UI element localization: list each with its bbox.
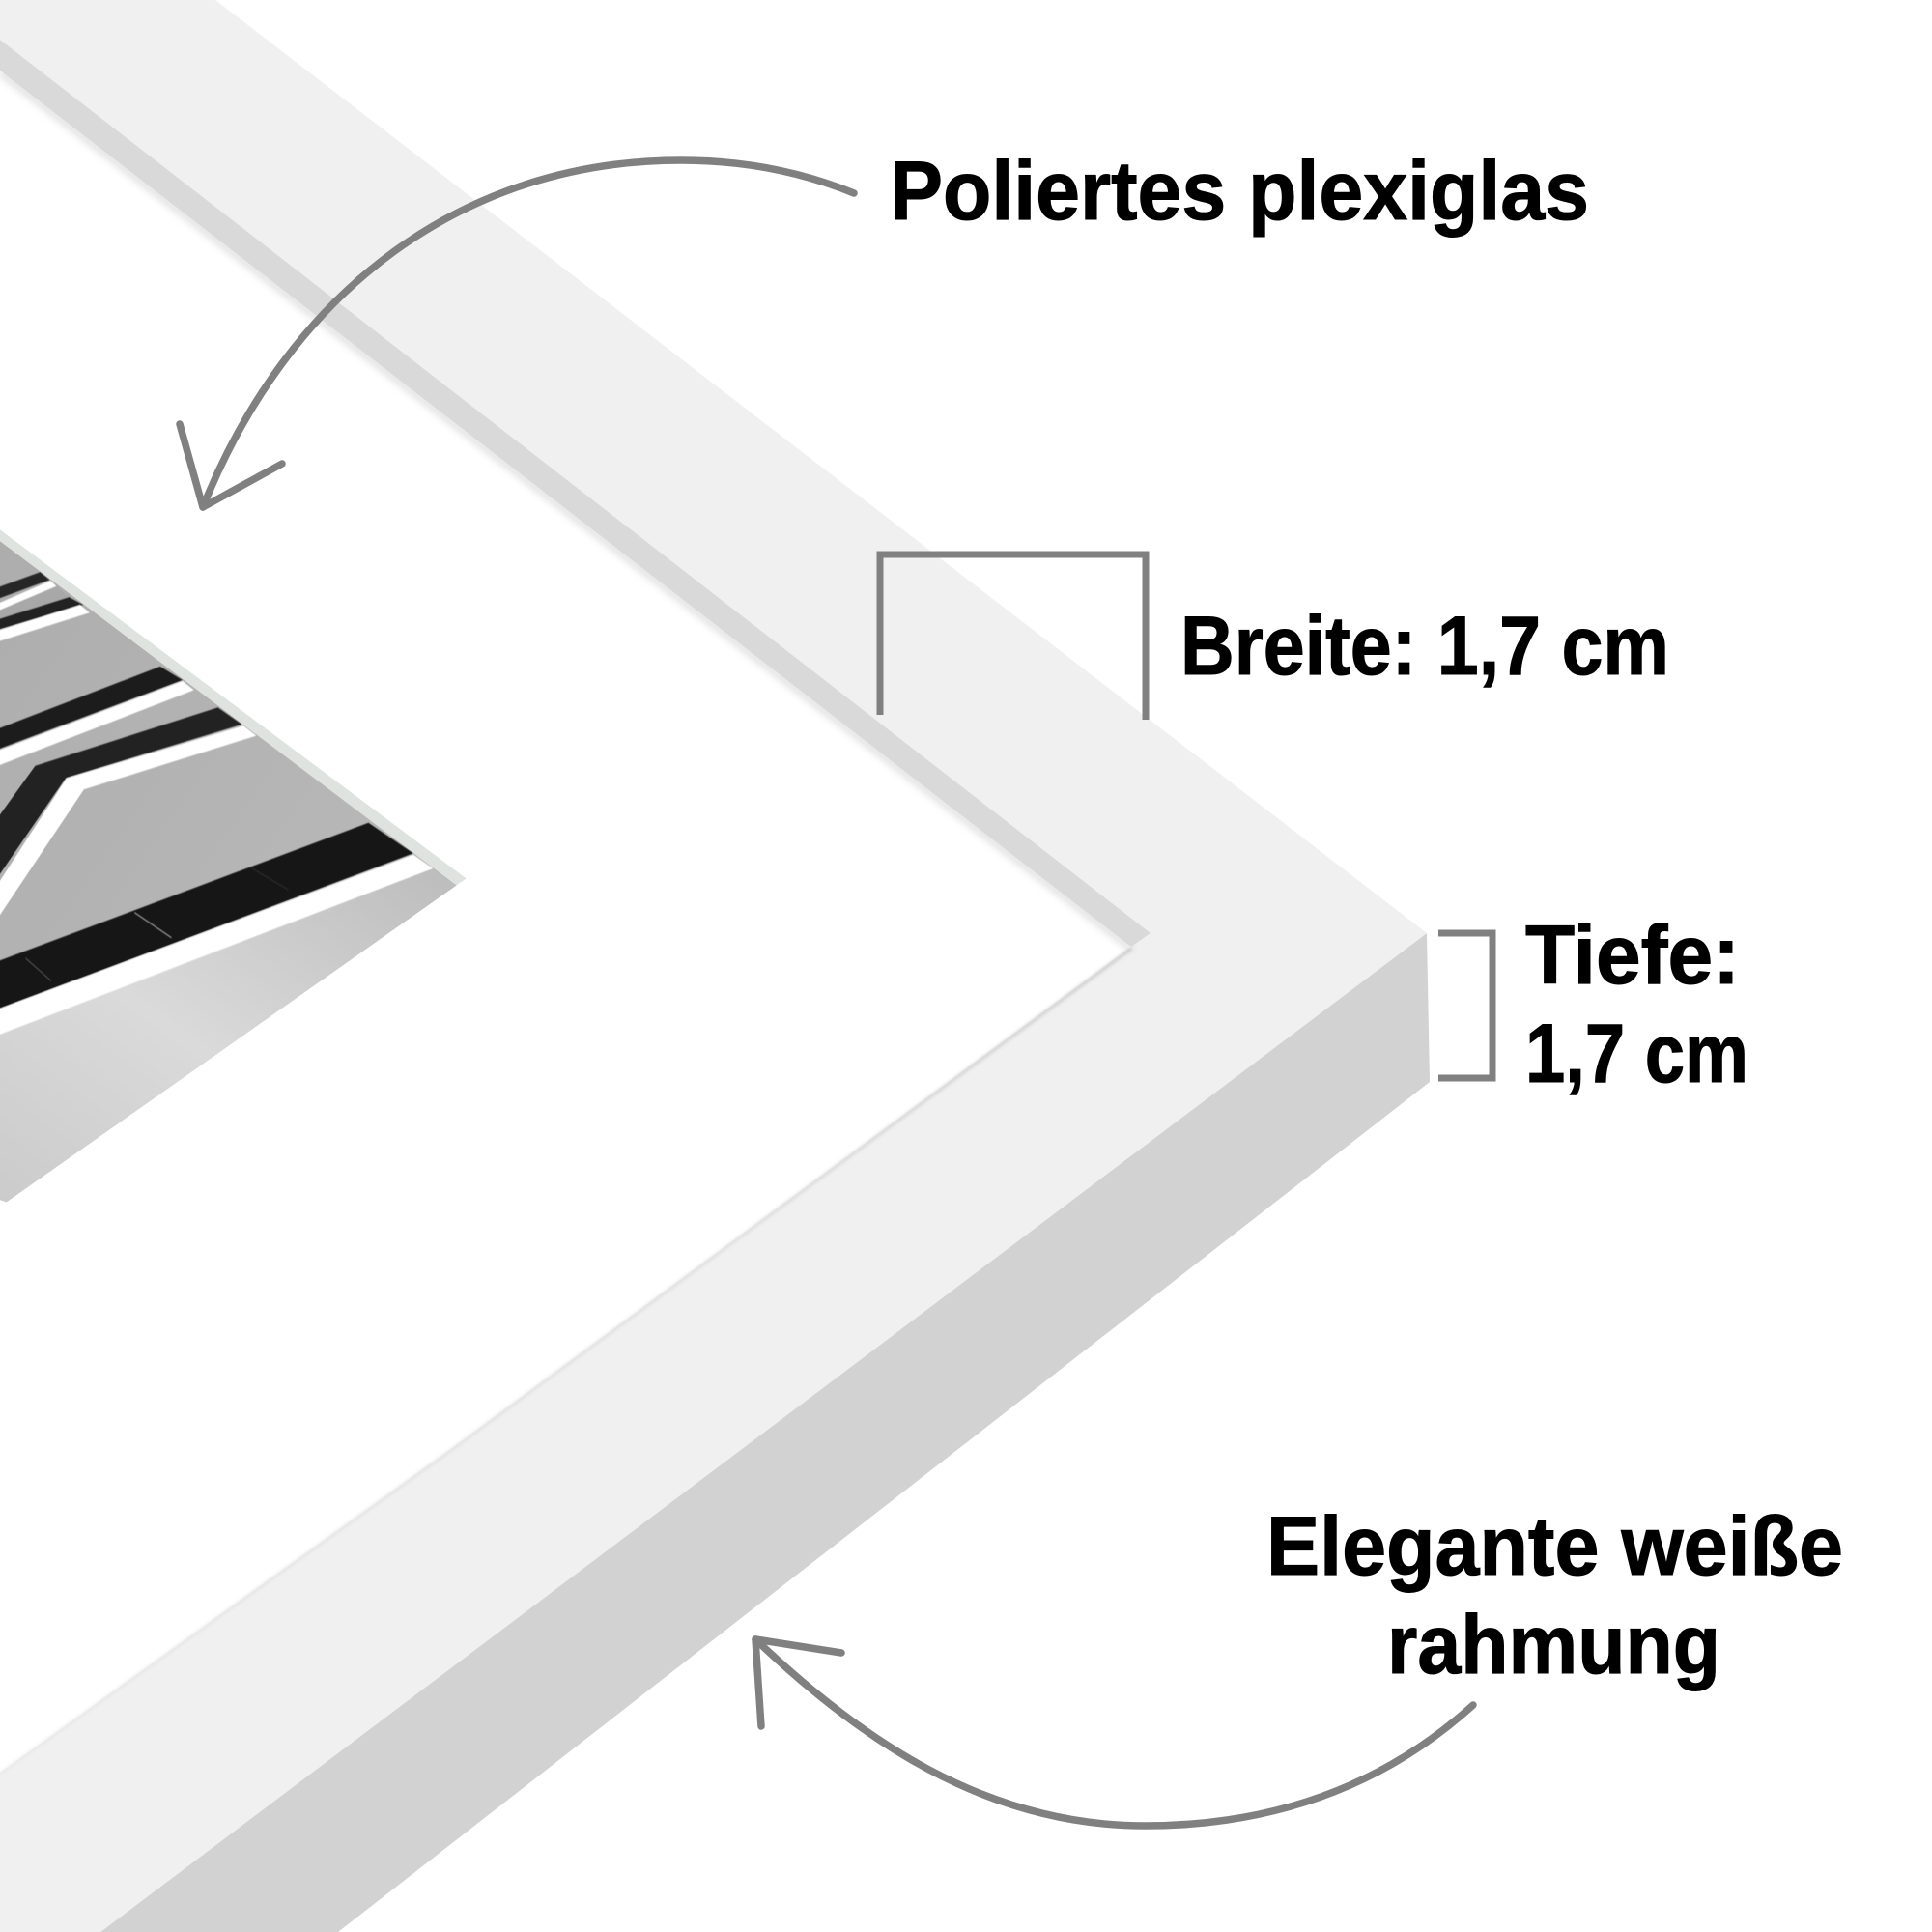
frame front face — [0, 0, 1427, 1932]
photo base — [0, 541, 457, 1202]
label: depth: Tiefe: — [1525, 909, 1740, 1002]
frame outer side face — [100, 933, 1430, 1932]
frame inner shadow — [0, 72, 1131, 1774]
picture frame — [0, 0, 1430, 1932]
depth bracket — [1438, 933, 1492, 1078]
stripes — [0, 572, 433, 1035]
label: depth: 1,7 cm — [1525, 1008, 1748, 1100]
label: width: Breite: 1,7 cm — [1180, 600, 1669, 693]
label: white frame: Elegante weiße — [1266, 1500, 1843, 1593]
photo in mat — [0, 529, 467, 1202]
arrow: polished acrylic — [180, 160, 854, 507]
label: white frame: rahmung — [1387, 1599, 1720, 1691]
mat bevel — [0, 529, 467, 885]
lower light wall — [0, 869, 457, 1202]
label: white frame — [1266, 1500, 1843, 1691]
label: depth — [1525, 909, 1748, 1100]
label: polished acrylic: Poliertes plexiglas — [890, 145, 1589, 238]
frame inner bevel — [0, 40, 1151, 947]
width bracket — [880, 554, 1146, 720]
arrow: white frame — [755, 1639, 1473, 1826]
